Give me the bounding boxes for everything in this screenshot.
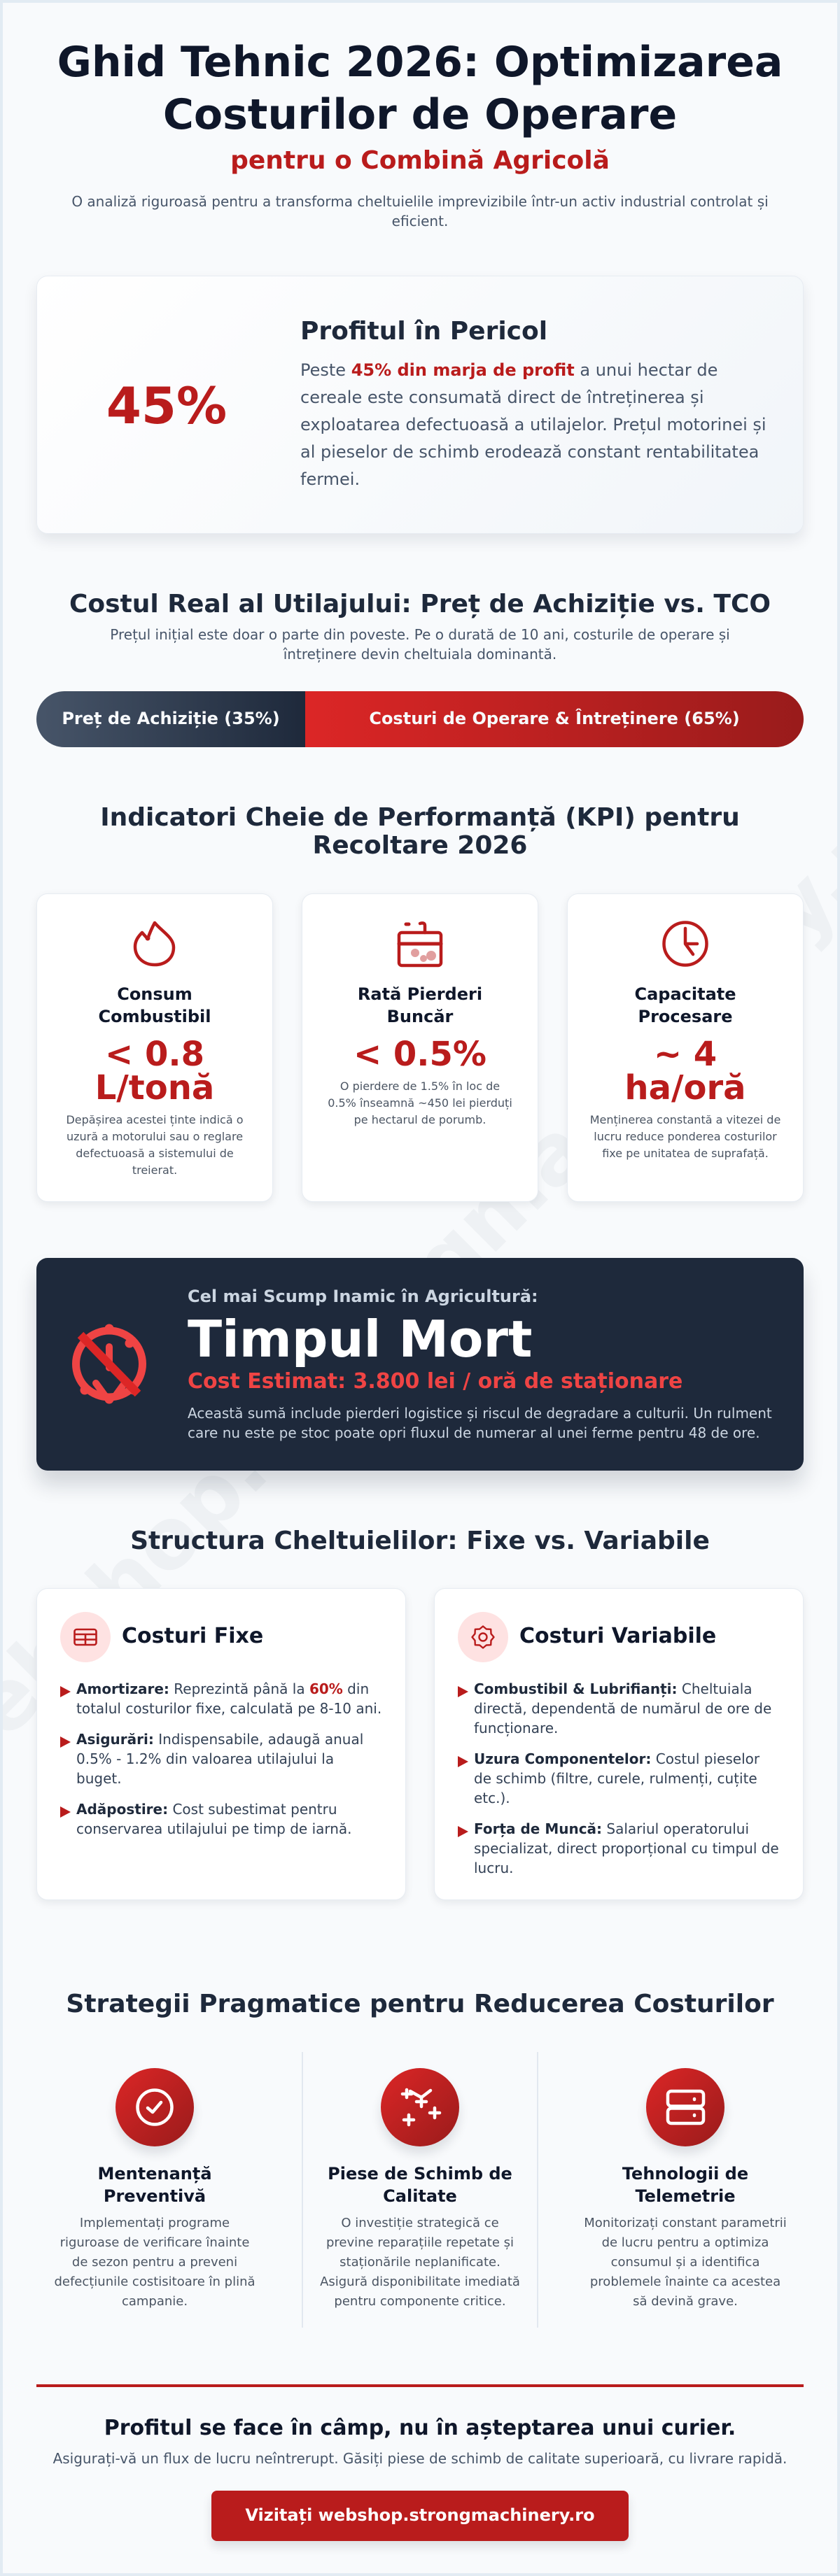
heading: profit at risk: Profitul în Pericol	[300, 317, 547, 346]
heading: KPI: Indicatori Cheie de Performanță (KPI) pentru	[100, 803, 740, 832]
icon: hopper	[398, 921, 442, 967]
paragraph: profit at risk	[300, 360, 766, 488]
list item: buget.	[76, 1770, 122, 1787]
strategy text: Asigură disponibilitate imediată	[320, 2274, 520, 2289]
title: Costurilor de Operare	[163, 90, 677, 139]
strategy text: defecțiunile costisitoare în plină	[54, 2274, 255, 2289]
list item: etc.).	[474, 1790, 510, 1806]
strategy title: Calitate	[383, 2186, 457, 2206]
KPI card: capacity	[567, 893, 804, 1202]
panel: profit at risk	[36, 276, 804, 534]
text: real cost: Prețul inițial este doar o parte din poveste. Pe o durată de 10 ani, costurile de operare și	[110, 626, 730, 643]
KPI card: grain loss	[302, 893, 538, 1202]
paragraph: profit at risk: Peste 45% din marja de profit a unui hectar de	[300, 360, 718, 380]
paragraph: profit at risk: exploatarea defectuoasă a utilajelor. Prețul motorinei și	[300, 415, 766, 434]
KPI value: L/tonă	[95, 1068, 214, 1107]
KPI description: Menținerea constantă a vitezei de	[590, 1113, 780, 1126]
list item	[458, 1820, 779, 1876]
heading: Costuri Variabile	[519, 1624, 716, 1648]
KPI value: < 0.5%	[354, 1035, 486, 1074]
paragraph: Această sumă include pierderi logistice și riscul de degradare a culturii. Un rulment	[188, 1405, 772, 1422]
strategy text: riguroase de verificare înainte	[60, 2235, 249, 2250]
list item	[458, 1750, 760, 1806]
list item: Uzura Componentelor: Costul pieselor	[474, 1750, 760, 1767]
list item: 0.5% - 1.2% din valoarea utilajului la	[76, 1750, 334, 1767]
KPI description: 0.5% înseamnă ~450 lei pierduți	[328, 1096, 512, 1110]
strategy title: Tehnologii de	[622, 2164, 748, 2184]
KPI description	[66, 1113, 244, 1177]
list item: Adăpostire: Cost subestimat pentru	[76, 1801, 337, 1818]
list item: funcționare.	[474, 1720, 558, 1736]
strategy text: previne reparațiile repetate și	[326, 2235, 514, 2250]
paragraph: profit at risk: cereale este consumată direct de întreținerea și	[300, 388, 704, 407]
icon: clock	[662, 921, 708, 967]
KPI description: Depășirea acestei ținte indică o	[66, 1113, 244, 1126]
bar segment: purchase price: Preț de Achiziție (35%)	[62, 709, 280, 728]
KPI title: Buncăr	[387, 1007, 453, 1026]
intro text: O analiză riguroasă pentru a transforma cheltuielile imprevizibile într-un activ industrial controlat și	[71, 193, 769, 210]
KPI description: O pierdere de 1.5% în loc de	[340, 1080, 500, 1093]
list item: Combustibil & Lubrifianți: Cheltuiala	[474, 1680, 752, 1697]
list item	[458, 1680, 771, 1736]
KPI description: lucru reduce ponderea costurilor	[594, 1130, 777, 1143]
KPI title: Combustibil	[98, 1007, 211, 1026]
bar segment: operating costs: Costuri de Operare & Întreținere (65%)	[369, 709, 740, 728]
divider	[302, 2052, 303, 2328]
strategy title: Telemetrie	[635, 2186, 736, 2206]
KPI title: Consum	[117, 984, 192, 1004]
strategy text: de lucru pentru a optimiza	[602, 2235, 769, 2250]
icon: crossed clock	[72, 1324, 146, 1403]
paragraph	[188, 1405, 772, 1441]
footer text: Asigurați-vă un flux de lucru neîntrerupt. Găsiți piese de schimb de calitate superioară, cu livrare rapidă.	[53, 2450, 787, 2467]
bar segment: operating costs	[305, 691, 804, 747]
heading: dead time: Timpul Mort	[188, 1310, 532, 1368]
strategy title	[328, 2164, 512, 2206]
title	[57, 38, 783, 139]
subtitle: pentru o Combină Agricolă	[230, 146, 610, 175]
list item: lucru.	[474, 1860, 513, 1876]
list item: de schimb (filtre, curele, rulmenți, cuțite	[474, 1770, 757, 1787]
strategy text: problemele înainte ca acestea	[590, 2274, 780, 2289]
heading: Costuri Fixe	[122, 1624, 263, 1648]
stacked bar: purchase vs TCO	[36, 691, 804, 747]
title: Ghid Tehnic 2026: Optimizarea	[57, 38, 783, 87]
text: real cost: întreținere devin cheltuiala dominantă.	[284, 646, 556, 663]
KPI title	[634, 984, 736, 1026]
list item	[60, 1801, 352, 1837]
strategy title: Preventivă	[104, 2186, 206, 2206]
strategy text: Monitorizați constant parametrii	[584, 2216, 787, 2230]
KPI description: pe hectarul de porumb.	[354, 1113, 486, 1126]
list item: Asigurări: Indispensabile, adaugă anual	[76, 1731, 363, 1748]
intro text	[71, 193, 769, 229]
paragraph: profit at risk: al pieselor de schimb erodează constant rentabilitatea	[300, 442, 759, 462]
strategy text: campanie.	[122, 2294, 188, 2309]
icon: sparkles	[381, 2068, 459, 2146]
panel: variable costs	[434, 1588, 804, 1900]
KPI title: Capacitate	[634, 984, 736, 1004]
strategy text: O investiție strategică ce	[341, 2216, 499, 2230]
strategy title	[97, 2164, 212, 2206]
strategy title: Mentenanță	[97, 2164, 212, 2184]
heading: real cost: Costul Real al Utilajului: Preț de Achiziție vs. TCO	[69, 590, 771, 618]
paragraph: profit at risk: fermei.	[300, 469, 360, 488]
KPI title: Rată Pierderi	[358, 984, 482, 1004]
text: real cost	[110, 626, 730, 663]
KPI description	[328, 1080, 512, 1126]
icon: flame	[133, 921, 175, 967]
strategy title	[622, 2164, 748, 2206]
heading: KPI	[100, 803, 740, 860]
cost estimate: Cost Estimat: 3.800 lei / oră de staționare	[188, 1369, 682, 1394]
KPI value	[624, 1035, 746, 1107]
bar segment: purchase price	[36, 691, 305, 747]
icon: check circle	[115, 2068, 194, 2146]
list item: Forța de Muncă: Salariul operatorului	[474, 1820, 749, 1837]
KPI description: uzură a motorului sau o reglare	[66, 1130, 243, 1143]
footer heading: Profitul se face în câmp, nu în așteptarea unui curier.	[104, 2416, 736, 2440]
list item: directă, dependentă de numărul de ore de	[474, 1700, 771, 1717]
intro text: eficient.	[392, 213, 448, 229]
list item: Amortizare: Reprezintă până la 60% din	[76, 1680, 369, 1697]
button: webshop: Vizitați webshop.strongmachinery.ro	[245, 2505, 595, 2525]
KPI description: fixe pe unitatea de suprafață.	[602, 1147, 769, 1160]
strategy text	[584, 2216, 787, 2309]
KPI description: defectuoasă a sistemului de	[76, 1147, 234, 1160]
strategy text: Implementați programe	[80, 2216, 230, 2230]
strategy text: consumul și a identifica	[611, 2255, 760, 2270]
stat: 45%: 45%	[106, 376, 227, 435]
heading: KPI: Recoltare 2026	[313, 831, 527, 860]
heading: strategies: Strategii Pragmatice pentru Reducerea Costurilor	[66, 1990, 774, 2018]
list item	[60, 1680, 382, 1717]
KPI description	[590, 1113, 780, 1160]
icon: server	[646, 2068, 724, 2146]
kicker: Cel mai Scump Inamic în Agricultură:	[188, 1287, 538, 1306]
KPI value	[95, 1035, 214, 1107]
strategy title: Piese de Schimb de	[328, 2164, 512, 2184]
icon: gear	[458, 1612, 508, 1662]
footer rule	[36, 2384, 804, 2387]
list item: specializat, direct proporțional cu timpul de	[474, 1840, 779, 1857]
KPI card: fuel	[36, 893, 273, 1202]
divider	[537, 2052, 538, 2328]
KPI value: ~ 4	[654, 1035, 717, 1074]
panel: downtime	[36, 1258, 804, 1471]
KPI value: ha/oră	[624, 1068, 746, 1107]
heading: expense structure: Structura Cheltuielilor: Fixe vs. Variabile	[130, 1527, 710, 1555]
strategy text: de sezon pentru a preveni	[72, 2255, 237, 2270]
KPI title: Procesare	[638, 1007, 732, 1026]
KPI title	[98, 984, 211, 1026]
KPI description: treierat.	[132, 1163, 177, 1177]
icon: table	[60, 1612, 111, 1662]
KPI title	[358, 984, 482, 1026]
button: webshop	[211, 2491, 629, 2541]
KPI value: < 0.8	[105, 1035, 204, 1074]
strategy text: să devină grave.	[633, 2294, 738, 2309]
strategy text	[54, 2216, 255, 2309]
list item	[60, 1731, 363, 1787]
strategy text	[320, 2216, 520, 2309]
strategy text: pentru componente critice.	[334, 2294, 506, 2309]
paragraph: care nu este pe stoc poate opri fluxul de numerar al unei ferme pentru 48 de ore.	[188, 1424, 760, 1441]
panel: fixed costs	[36, 1588, 406, 1900]
strategy text: staționările neplanificate.	[340, 2255, 500, 2270]
list item: totalul costurilor fixe, calculată pe 8-10 ani.	[76, 1700, 382, 1717]
list item: conservarea utilajului pe timp de iarnă.	[76, 1820, 352, 1837]
